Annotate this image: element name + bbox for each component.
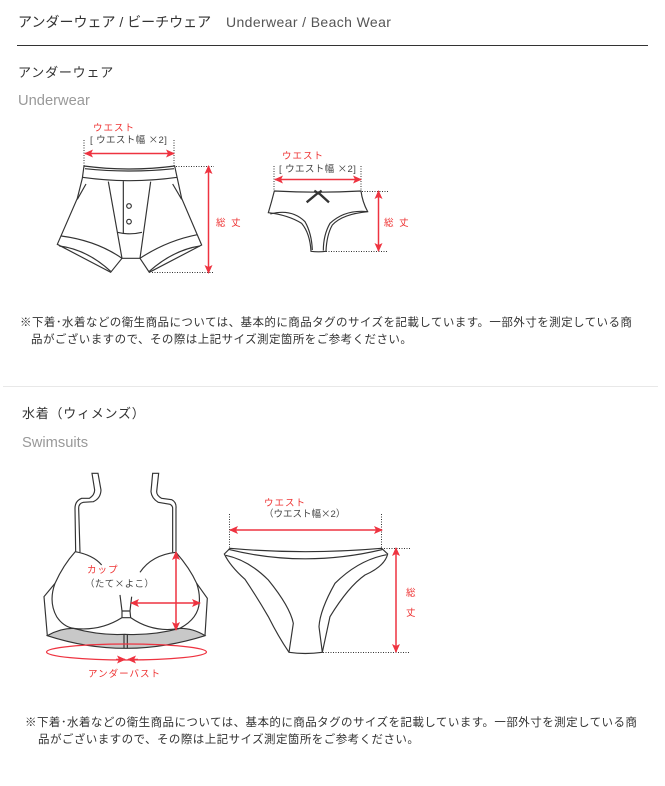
section heading: underwear: アンダーウェア bbox=[18, 65, 114, 80]
diagram: bikini bottom: （ウエスト幅×2） bbox=[264, 506, 345, 520]
diagram: bikini bottom: 総 bbox=[406, 587, 416, 599]
note: swimsuits: 品がございますので、その際は上記サイズ測定箇所をご参考ください。 bbox=[38, 734, 419, 746]
section subheading: Swimsuits: Swimsuits bbox=[22, 435, 88, 451]
diagram: women's briefs: 総 丈 bbox=[384, 217, 410, 229]
note: swimsuits: ※下着･水着などの衛生商品については、基本的に商品タグのサイズを記載しています。一部外寸を測定している商 bbox=[25, 717, 637, 729]
diagram: bikini bottom: 丈 bbox=[406, 608, 416, 619]
note: underwear: 品がございますので、その際は上記サイズ測定箇所をご参考ください。 bbox=[31, 334, 412, 346]
diagram: women's briefs bbox=[268, 151, 410, 252]
text: Underwear / Beach Wear bbox=[226, 14, 391, 30]
diagram: bikini top: （たて×よこ） bbox=[85, 576, 154, 590]
diagram: bikini bottom: ウエスト bbox=[264, 498, 306, 509]
section subheading: Underwear: Underwear bbox=[18, 93, 90, 109]
diagram: boxer briefs: ウエスト bbox=[93, 123, 135, 134]
diagram: women's briefs: ウエスト bbox=[282, 151, 324, 162]
note: underwear: ※下着･水着などの衛生商品については、基本的に商品タグのサイズを記載しています。一部外寸を測定している商 bbox=[20, 317, 632, 329]
diagram: boxer briefs bbox=[57, 123, 242, 273]
page title bbox=[18, 14, 391, 30]
diagram: bikini top: アンダーバスト bbox=[88, 668, 161, 680]
diagram: bikini top bbox=[44, 473, 207, 680]
section heading: swimsuits: 水着（ウィメンズ） bbox=[22, 406, 146, 421]
diagram: bikini bottom bbox=[224, 498, 416, 653]
note: underwear bbox=[20, 316, 632, 346]
diagram: bikini top: カップ bbox=[87, 565, 119, 576]
note: swimsuits bbox=[25, 716, 637, 746]
diagram: boxer briefs: [ ウエスト幅 ×2] bbox=[90, 132, 167, 146]
page title: アンダーウェア / ビーチウェア bbox=[18, 14, 211, 30]
diagram: women's briefs: [ ウエスト幅 ×2] bbox=[279, 161, 356, 175]
diagram: boxer briefs: 総 丈 bbox=[216, 217, 242, 229]
